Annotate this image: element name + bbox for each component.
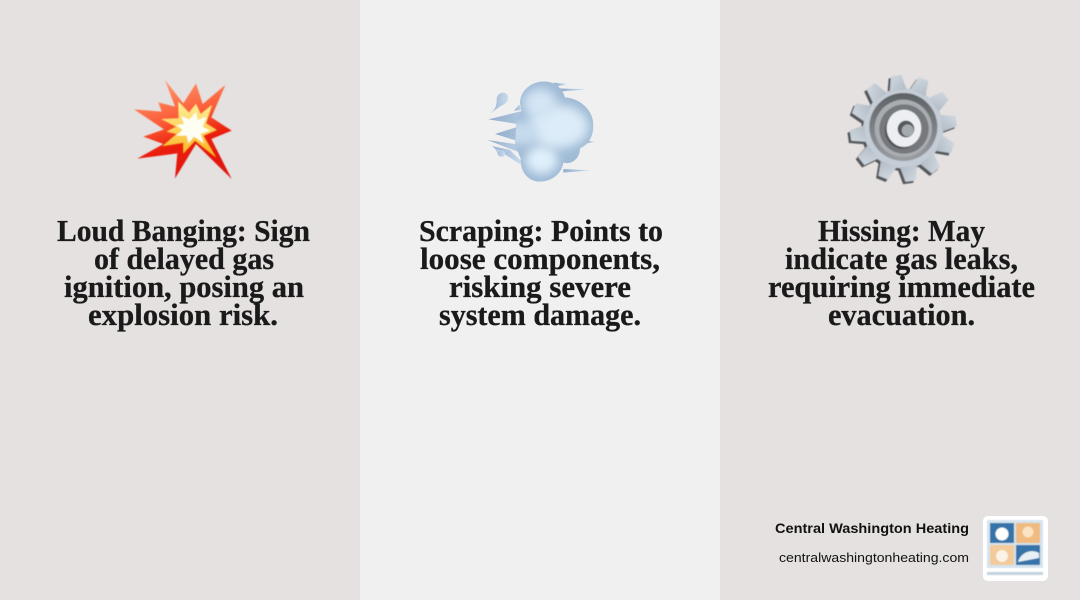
- heading: scraping: [419, 213, 663, 332]
- heading: loud banging: [57, 213, 310, 332]
- panel: scraping: [360, 0, 720, 600]
- heading: hissing: [768, 213, 1035, 332]
- icon: gear: [847, 74, 957, 185]
- heading: loud banging: of delayed gas: [94, 241, 274, 276]
- icon: explosion: [134, 80, 232, 179]
- icon: dash cloud: [488, 82, 594, 182]
- brand footer: [775, 516, 1048, 581]
- heading: scraping: loose components,: [420, 241, 660, 276]
- heading: hissing: evacuation.: [828, 297, 975, 332]
- heading: hissing: requiring immediate: [768, 269, 1035, 304]
- heading: scraping: Scraping: Points to: [419, 213, 663, 248]
- company name: Central Washington Heating: [775, 521, 969, 536]
- panel: loud banging: [0, 0, 360, 600]
- heading: loud banging: Loud Banging: Sign: [57, 213, 310, 248]
- logo: [983, 516, 1048, 581]
- panel: hissing: [720, 0, 1080, 600]
- heading: hissing: Hissing: May: [818, 213, 985, 248]
- heading: hissing: indicate gas leaks,: [785, 241, 1018, 276]
- heading: loud banging: explosion risk.: [88, 297, 278, 332]
- company url: centralwashingtonheating.com: [779, 550, 969, 565]
- heading: loud banging: ignition, posing an: [64, 269, 304, 304]
- heading: scraping: risking severe: [449, 269, 631, 304]
- heading: scraping: system damage.: [439, 297, 641, 332]
